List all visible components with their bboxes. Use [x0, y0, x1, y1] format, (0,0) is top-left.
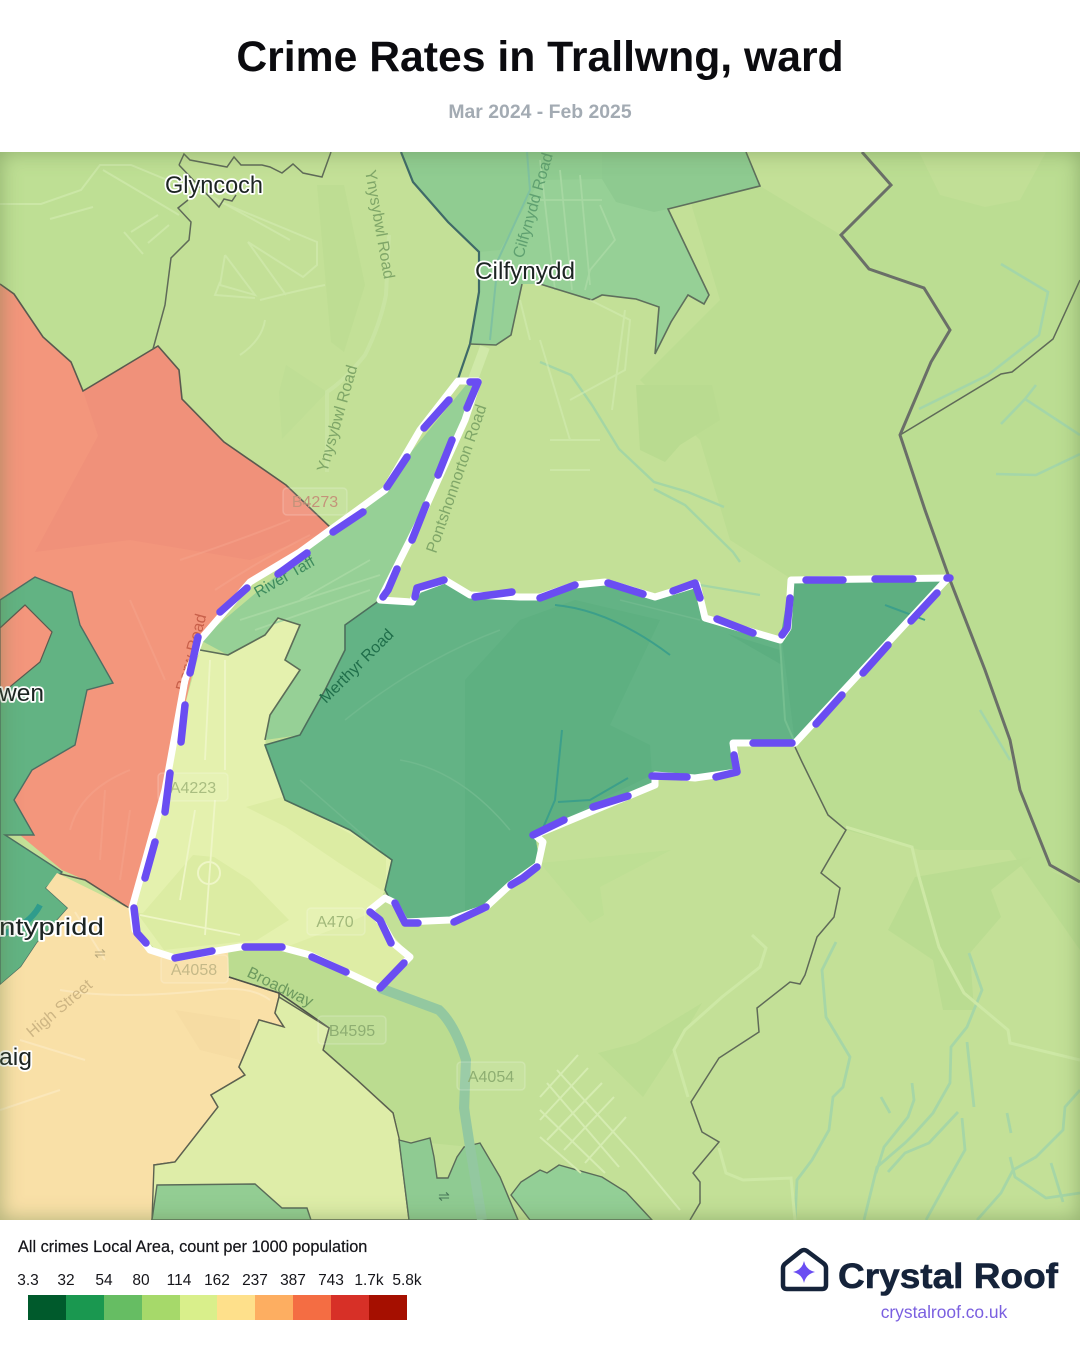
- region: pale yellow-green area: [132, 618, 410, 988]
- road labels: River Taff: [252, 553, 318, 601]
- road labels: Berw Road: [173, 612, 210, 693]
- place labels: ntypridd: [0, 914, 104, 941]
- region: northern part of ward: [200, 385, 478, 740]
- major boundary: thick grey line: [841, 152, 1080, 882]
- icons: railway stations: [94, 945, 450, 1204]
- road shields: A4058: [171, 962, 217, 979]
- region: south pale area: [152, 997, 409, 1220]
- legend: 32: [57, 1272, 75, 1289]
- subtitle: date range: Mar 2024 - Feb 2025: [448, 101, 632, 123]
- legend: 1.7k: [354, 1272, 384, 1289]
- road labels: Ynysybwl Road: [361, 169, 397, 280]
- region: main part of ward: [265, 578, 948, 920]
- legend title: All crimes Local Area, count per 1000 population: [18, 1238, 367, 1256]
- ward outline: purple dashes: [134, 382, 950, 988]
- icons: railway stations: ⇌: [438, 1188, 450, 1204]
- legend: 114: [167, 1272, 191, 1289]
- road labels: Ynysybwl Road: [315, 363, 361, 474]
- map base: light green areas: [0, 152, 1080, 1220]
- icon: house with sparkle: [783, 1250, 826, 1289]
- road shields: A470: [316, 914, 354, 931]
- legend scale labels: [17, 1262, 814, 1289]
- legend: 5.8k: [392, 1272, 422, 1289]
- streams and faint roads: [520, 264, 1080, 1220]
- road labels: Pontshonnorton Road: [424, 403, 490, 555]
- icons: railway stations: ⇌: [94, 945, 106, 961]
- road shields: A4054: [468, 1069, 514, 1086]
- legend: 54: [95, 1272, 113, 1289]
- legend colour swatches: [28, 1295, 407, 1320]
- river Taff: [380, 988, 482, 1220]
- legend: [17, 1238, 422, 1320]
- legend: 743: [318, 1272, 344, 1289]
- road shields: B4595: [329, 1023, 375, 1040]
- place labels: [0, 172, 575, 1071]
- road shields: A4223: [170, 780, 216, 797]
- streets in Glyncoch: [0, 165, 389, 472]
- legend: 237: [242, 1272, 268, 1289]
- road labels: Broadway: [244, 964, 316, 1011]
- choropleth map: [0, 152, 1080, 1220]
- region: Broadway corridor: [229, 945, 470, 1147]
- legend: 387: [280, 1272, 306, 1289]
- road labels: [24, 151, 557, 1041]
- place labels: Cilfynydd: [475, 258, 575, 285]
- brand URL: crystalroof.co.uk: [881, 1302, 1008, 1322]
- map edge shading: [0, 152, 1080, 1220]
- legend: 80: [132, 1272, 150, 1289]
- legend: 3.3: [17, 1272, 39, 1289]
- road shields: [158, 488, 525, 1090]
- region: Cilfynydd green area: [401, 152, 760, 382]
- road shields: B4273: [292, 494, 338, 511]
- region: pale orange area: [0, 873, 284, 1220]
- ward outline: white base: [132, 381, 948, 988]
- region: south green areas: [152, 1138, 652, 1220]
- place labels: Glyncoch: [165, 172, 263, 199]
- logo: Crystal Roof: [780, 1248, 1058, 1322]
- region: high crime red area: [0, 284, 332, 910]
- title: Crime Rates in Trallwng, ward: [236, 33, 844, 81]
- road labels: High Street: [24, 976, 96, 1041]
- ward boundaries: thin lines: [153, 152, 1080, 1220]
- place labels: wen: [0, 680, 44, 707]
- brand name: Crystal Roof: [838, 1257, 1058, 1296]
- road labels: Merthyr Road: [317, 626, 397, 707]
- road labels: Cilfynydd Road: [511, 152, 557, 260]
- region: left green area: [0, 577, 113, 985]
- legend: 162: [204, 1272, 230, 1289]
